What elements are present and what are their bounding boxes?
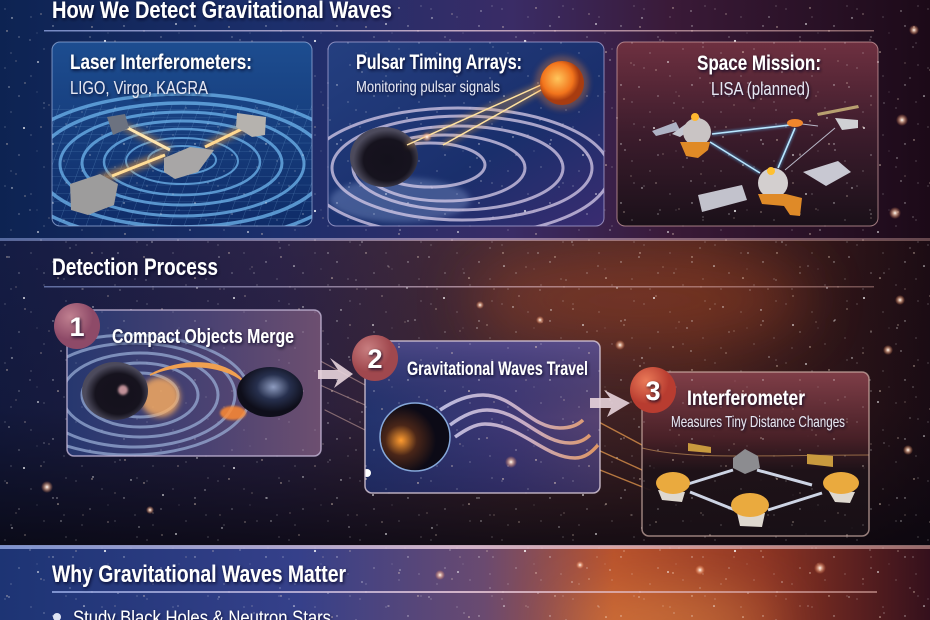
- step 2: gravitational waves travel: [352, 335, 600, 493]
- panel: space mission LISA: [617, 42, 878, 226]
- subtitle: LISA (planned): LISA (planned): [711, 79, 810, 99]
- illustration: pulsar beams, dense star and spiral waves: [328, 53, 604, 226]
- title: Compact Objects Merge: Compact Objects Merge: [112, 326, 294, 348]
- title: Laser Interferometers: Laser Interferometers:: [70, 51, 252, 74]
- subtitle: Monitoring pulsar signals: Monitoring pulsar signals: [356, 79, 500, 96]
- title: Gravitational Waves Travel: Gravitational Waves Travel: [407, 359, 588, 380]
- step 1: compact objects merge: [54, 303, 322, 457]
- illustration: ripple rings and L-shaped detector: [52, 92, 312, 226]
- illustration: dark star emitting wave trains: [363, 395, 598, 477]
- illustration: two merging compact objects: [67, 334, 303, 456]
- number badge 3: 3: [645, 376, 661, 406]
- panel: pulsar timing arrays: [328, 42, 604, 226]
- title: Interferometer: Interferometer: [687, 387, 805, 410]
- arrow: step 1 to step 2: [318, 358, 353, 388]
- number badge 1: [54, 303, 100, 349]
- streak lines behind the steps: [300, 350, 650, 490]
- title: Pulsar Timing Arrays: Pulsar Timing Arrays:: [356, 51, 522, 74]
- subtitle: Measures Tiny Distance Changes: Measures Tiny Distance Changes: [671, 414, 845, 431]
- illustration: interferometer with four stations: [642, 443, 869, 527]
- panel: laser interferometers: [52, 42, 312, 226]
- subtitle: LIGO, Virgo, KAGRA: LIGO, Virgo, KAGRA: [70, 78, 208, 98]
- heading: Why Gravitational Waves Matter: Why Gravitational Waves Matter: [52, 561, 346, 588]
- illustration: LISA satellites and laser links: [652, 105, 859, 216]
- heading: Detection Process: Detection Process: [52, 254, 218, 281]
- arrow: step 2 to step 3: [590, 390, 630, 417]
- number badge 1: 1: [69, 312, 85, 342]
- number badge 3: [630, 367, 676, 413]
- number badge 2: [352, 335, 398, 381]
- title: Space Mission: Space Mission:: [697, 52, 821, 75]
- step 3: interferometer: [630, 367, 869, 536]
- number badge 2: 2: [367, 344, 383, 374]
